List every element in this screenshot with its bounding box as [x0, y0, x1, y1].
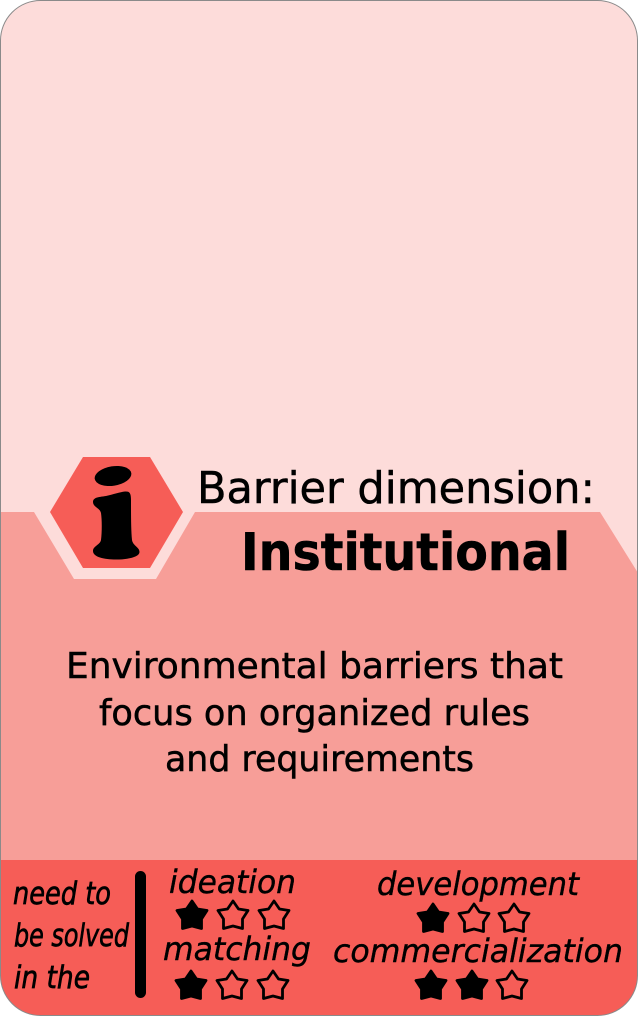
text block: need to be solved in the: be solved: [14, 918, 129, 954]
stage: commercialization: commercialization: [333, 932, 623, 970]
icon: institutional info hexagon: [50, 457, 183, 568]
heading: institutional: Institutional: [241, 523, 570, 583]
panel: solving stages band: [0, 860, 638, 1016]
panel: description band: [0, 512, 638, 861]
text block: description: [66, 646, 563, 780]
stage: development: [377, 865, 580, 932]
stage: matching: [163, 930, 311, 998]
text block: need to be solved in the: [13, 876, 129, 996]
text block: description: Environmental barriers that: [66, 646, 563, 687]
text block: description: focus on organized rules: [99, 693, 530, 734]
text block: need to be solved in the: in the: [14, 960, 90, 996]
stage: ideation: ideation: [169, 863, 296, 901]
stage: commercialization: [333, 932, 623, 998]
stage: development: development: [377, 865, 580, 903]
stage: ideation: [169, 863, 296, 928]
heading: barrier dimension label: Barrier dimension:: [197, 463, 595, 514]
text block: description: and requirements: [165, 739, 474, 780]
divider bar: [135, 871, 146, 998]
text block: need to be solved in the: need to: [13, 876, 111, 912]
stage: matching: matching: [163, 930, 311, 968]
